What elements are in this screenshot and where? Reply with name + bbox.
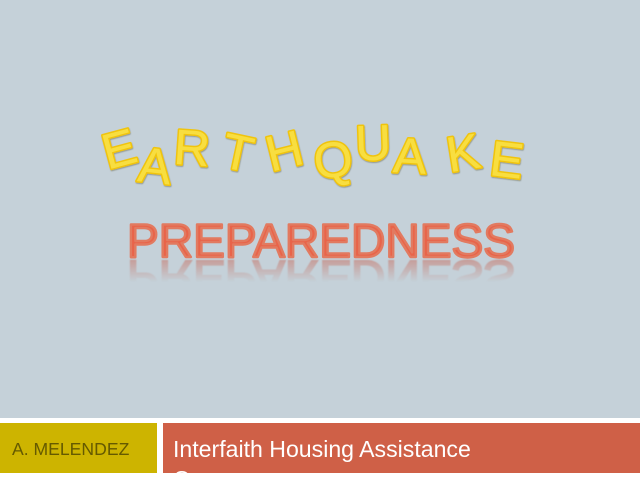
letter U: U xyxy=(354,114,392,172)
author label: A. MELENDEZ xyxy=(12,439,129,459)
letter A: A xyxy=(135,136,175,196)
heading: EARTHQUAKE xyxy=(96,114,527,196)
letter E: E xyxy=(487,130,527,190)
reflection of PREPAREDNESS: PREPAREDNESS xyxy=(127,250,515,303)
letter R: R xyxy=(172,119,212,177)
letter H: H xyxy=(260,119,309,183)
letter K: K xyxy=(442,123,484,183)
organization label xyxy=(163,423,640,473)
letter Q: Q xyxy=(310,130,356,190)
letter E: E xyxy=(96,118,143,180)
heading: PREPAREDNESS: PREPAREDNESS xyxy=(127,215,515,268)
organization label: Interfaith Housing Assistance xyxy=(173,436,471,462)
letter A: A xyxy=(392,127,429,185)
author label xyxy=(0,423,157,473)
letter T: T xyxy=(217,122,259,184)
title artwork xyxy=(101,124,525,280)
